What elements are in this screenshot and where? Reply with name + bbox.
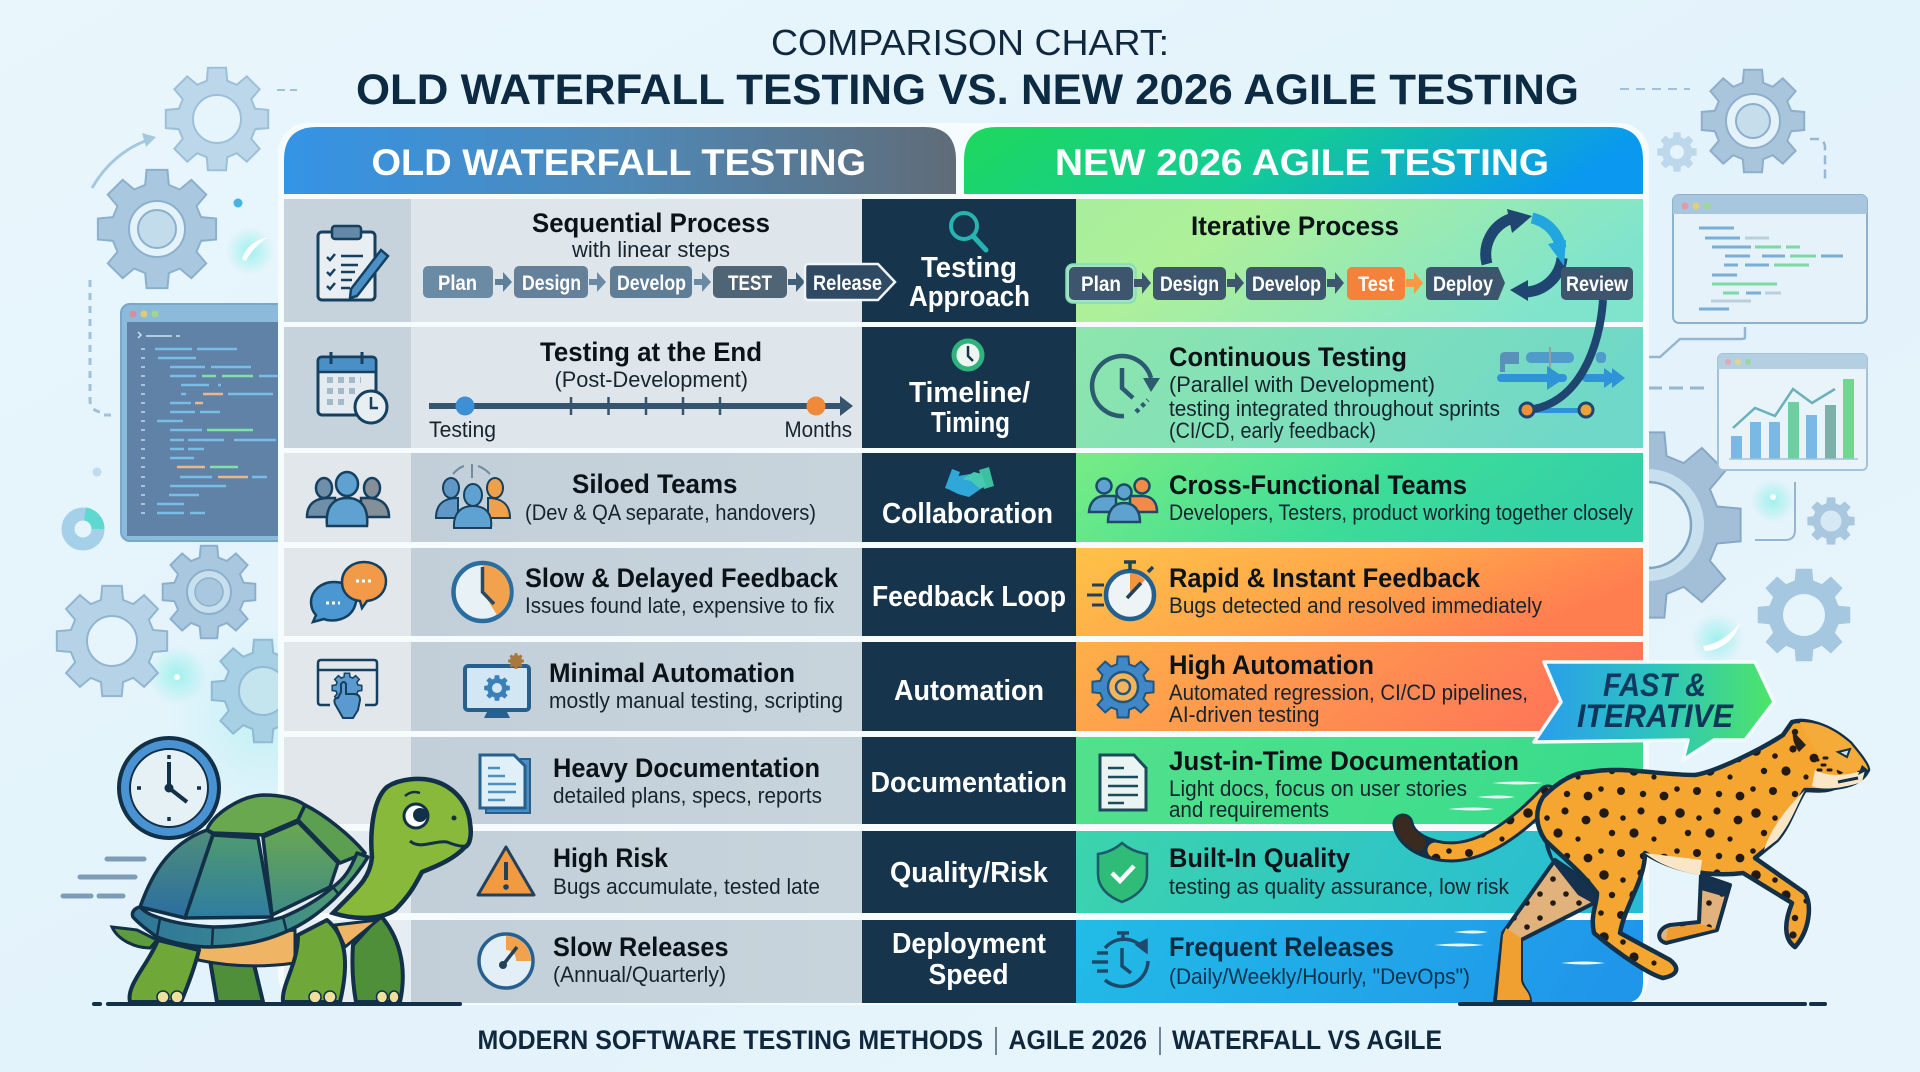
far front leg	[1659, 875, 1730, 943]
subheading: (Dev & QA separate, handovers)	[525, 500, 816, 525]
row label: Approach	[909, 281, 1030, 313]
icon: hand on window	[318, 660, 377, 718]
description	[1169, 680, 1528, 727]
far legs	[210, 915, 403, 1002]
left decorations: gears, terminal and connectors	[57, 68, 357, 815]
row label: Collaboration	[882, 498, 1053, 530]
timeline: Testing	[429, 417, 496, 442]
icon: stopwatch	[1087, 562, 1154, 619]
icon: gauge	[479, 934, 533, 988]
description: (Parallel with Development)	[1169, 372, 1435, 397]
subheading: testing as quality assurance, low risk	[1169, 874, 1510, 899]
icon: team grey	[307, 472, 389, 526]
tail	[112, 927, 157, 948]
gear small	[1657, 132, 1697, 172]
eye and mouth	[404, 792, 465, 846]
description: testing integrated throughout sprints	[1169, 396, 1500, 421]
title	[356, 22, 1579, 114]
row label: Deployment	[892, 928, 1046, 960]
row 1: testing approach	[284, 199, 1643, 322]
icon: clock with delay	[454, 563, 512, 621]
description: and requirements	[1169, 797, 1329, 822]
bar chart window	[1718, 354, 1867, 470]
process steps	[423, 264, 895, 300]
gear clipped	[212, 640, 314, 742]
subheading: Developers, Testers, product working together closely	[1169, 500, 1634, 525]
heading: Continuous Testing	[1169, 342, 1407, 372]
callout: fast and iterative: ITERATIVE	[1577, 698, 1735, 734]
description: (CI/CD, early feedback)	[1169, 418, 1376, 443]
process steps: Design	[522, 272, 581, 295]
row 4: feedback loop	[284, 548, 1643, 636]
process steps: Release	[813, 272, 882, 295]
row label	[892, 928, 1046, 991]
subheading: Bugs detected and resolved immediately	[1169, 593, 1543, 618]
plastron	[195, 920, 378, 966]
illustration: tortoise with clock	[63, 738, 471, 1004]
icon: handshake	[945, 467, 994, 497]
callout: fast and iterative	[1534, 662, 1774, 760]
icon: magnifier	[951, 213, 986, 250]
footer: AGILE 2026	[1008, 1025, 1147, 1055]
iterative steps: Test	[1358, 273, 1394, 296]
neck and head	[333, 779, 471, 918]
code window	[1673, 195, 1867, 323]
row label: Timing	[931, 407, 1010, 439]
ground line	[94, 1002, 460, 1006]
heading: Built-In Quality	[1169, 843, 1350, 873]
timeline: Months	[784, 417, 852, 442]
subheading: mostly manual testing, scripting	[549, 688, 843, 713]
title line one: COMPARISON CHART:	[771, 22, 1169, 63]
heading: High Automation	[1169, 650, 1374, 680]
sprint gantt graphic	[1497, 347, 1625, 413]
iterative steps: Design	[1160, 273, 1219, 296]
icon: cross-functional team	[1089, 478, 1157, 522]
subheading: (Annual/Quarterly)	[553, 962, 726, 987]
heading: Slow Releases	[553, 932, 728, 962]
subheading: detailed plans, specs, reports	[553, 783, 822, 808]
row label: Timeline/	[909, 377, 1030, 409]
tail	[1403, 795, 1548, 852]
description: AI-driven testing	[1169, 702, 1320, 727]
heading: Sequential Process	[532, 208, 770, 238]
description: Automated regression, CI/CD pipelines,	[1169, 680, 1528, 705]
iterative steps: Plan	[1081, 273, 1121, 296]
subheading: (Post-Development)	[554, 367, 748, 392]
icon: automation gear	[1092, 656, 1154, 718]
footer: MODERN SOFTWARE TESTING METHODS	[478, 1025, 983, 1055]
subheading: Bugs accumulate, tested late	[553, 874, 820, 899]
icon: document stack	[480, 755, 530, 813]
heading: Minimal Automation	[549, 658, 795, 688]
shell	[132, 795, 368, 947]
subheading: Issues found late, expensive to fix	[525, 593, 835, 618]
illustration: running cheetah	[1403, 721, 1868, 1004]
icon: document	[1100, 755, 1146, 810]
gear big right	[1555, 432, 1741, 618]
heading: Cross-Functional Teams	[1169, 470, 1467, 500]
heading: Siloed Teams	[572, 469, 738, 499]
gear second	[98, 170, 216, 288]
process steps: Develop	[617, 272, 686, 295]
row label: Testing	[921, 252, 1017, 284]
heading: Iterative Process	[1191, 211, 1399, 241]
icon: warning triangle	[478, 847, 534, 895]
icon: calendar and clock	[318, 352, 387, 423]
icon: siloed team	[436, 464, 510, 528]
terminal window	[121, 304, 296, 541]
iterative steps: Review	[1566, 273, 1629, 296]
icon: shield with check	[1098, 843, 1147, 902]
speed lines	[1434, 782, 1605, 964]
callout: fast and iterative: FAST &	[1603, 667, 1706, 703]
timeline	[429, 396, 853, 442]
description	[1169, 372, 1500, 443]
icon: green clock	[954, 341, 982, 369]
process steps: TEST	[728, 272, 772, 295]
right decorations: gears, windows and connectors	[1555, 70, 1867, 665]
row 7: quality and risk	[284, 831, 1643, 913]
row 2: timeline	[284, 327, 1643, 448]
heading: High Risk	[553, 843, 669, 873]
table frame	[278, 123, 1649, 1005]
row label: Documentation	[870, 767, 1067, 799]
clock	[119, 738, 219, 838]
gear bottom right	[1758, 569, 1850, 661]
gear top	[166, 68, 268, 170]
row label: Quality/Risk	[890, 857, 1049, 889]
icon: clipboard and pencil	[318, 226, 388, 300]
description	[1169, 776, 1467, 822]
gear top right	[1702, 70, 1804, 172]
dashed connector	[90, 280, 113, 415]
far hind leg	[1495, 833, 1600, 1002]
row 5: automation	[284, 642, 1643, 731]
left column header: OLD WATERFALL TESTING	[372, 142, 866, 183]
row label: Speed	[928, 959, 1008, 991]
row label	[909, 252, 1030, 313]
ground line	[1460, 1002, 1825, 1006]
right column header: NEW 2026 AGILE TESTING	[1055, 142, 1549, 183]
heading: Frequent Releases	[1169, 932, 1394, 962]
right column header	[964, 127, 1643, 194]
row 6: documentation	[284, 737, 1643, 824]
icon: frequent release clock	[1092, 933, 1148, 986]
heading: Heavy Documentation	[553, 753, 820, 783]
footer	[478, 1025, 1442, 1055]
row 3: collaboration	[284, 453, 1643, 542]
icon: continuous clock	[1092, 356, 1160, 416]
donut chart	[68, 514, 98, 544]
heading: Just-in-Time Documentation	[1169, 746, 1519, 776]
left column header	[284, 127, 956, 194]
row 8: deployment speed	[284, 920, 1643, 1003]
body	[1537, 721, 1868, 978]
row label	[909, 377, 1030, 439]
title line two: OLD WATERFALL TESTING VS. NEW 2026 AGILE TESTING	[356, 66, 1579, 114]
iterative steps	[1066, 264, 1633, 303]
heading: Testing at the End	[540, 337, 762, 367]
iterative steps: Develop	[1252, 273, 1321, 296]
heading: Slow & Delayed Feedback	[525, 563, 839, 593]
near legs	[130, 920, 345, 1002]
chest and belly	[1645, 790, 1805, 875]
description: Light docs, focus on user stories	[1169, 776, 1467, 801]
head details	[1793, 722, 1868, 789]
arrow arc	[92, 133, 156, 188]
subheading: with linear steps	[571, 237, 730, 262]
gear left	[57, 586, 167, 696]
icon: chat bubbles	[311, 562, 386, 622]
gear small right	[1807, 497, 1855, 545]
row label: Feedback Loop	[872, 581, 1066, 613]
iterative steps: Deploy	[1433, 273, 1493, 296]
toes	[157, 991, 399, 1003]
heading: Rapid & Instant Feedback	[1169, 563, 1481, 593]
footer: WATERFALL VS AGILE	[1172, 1025, 1442, 1055]
gear lower	[163, 546, 255, 638]
review feedback curve	[1520, 300, 1603, 417]
icon: monitor with gears	[465, 653, 529, 718]
subheading: (Daily/Weekly/Hourly, "DevOps")	[1169, 964, 1470, 989]
speed lines	[63, 859, 144, 896]
iteration cycle	[1486, 209, 1566, 301]
row label: Automation	[894, 675, 1044, 707]
process steps: Plan	[438, 272, 477, 295]
